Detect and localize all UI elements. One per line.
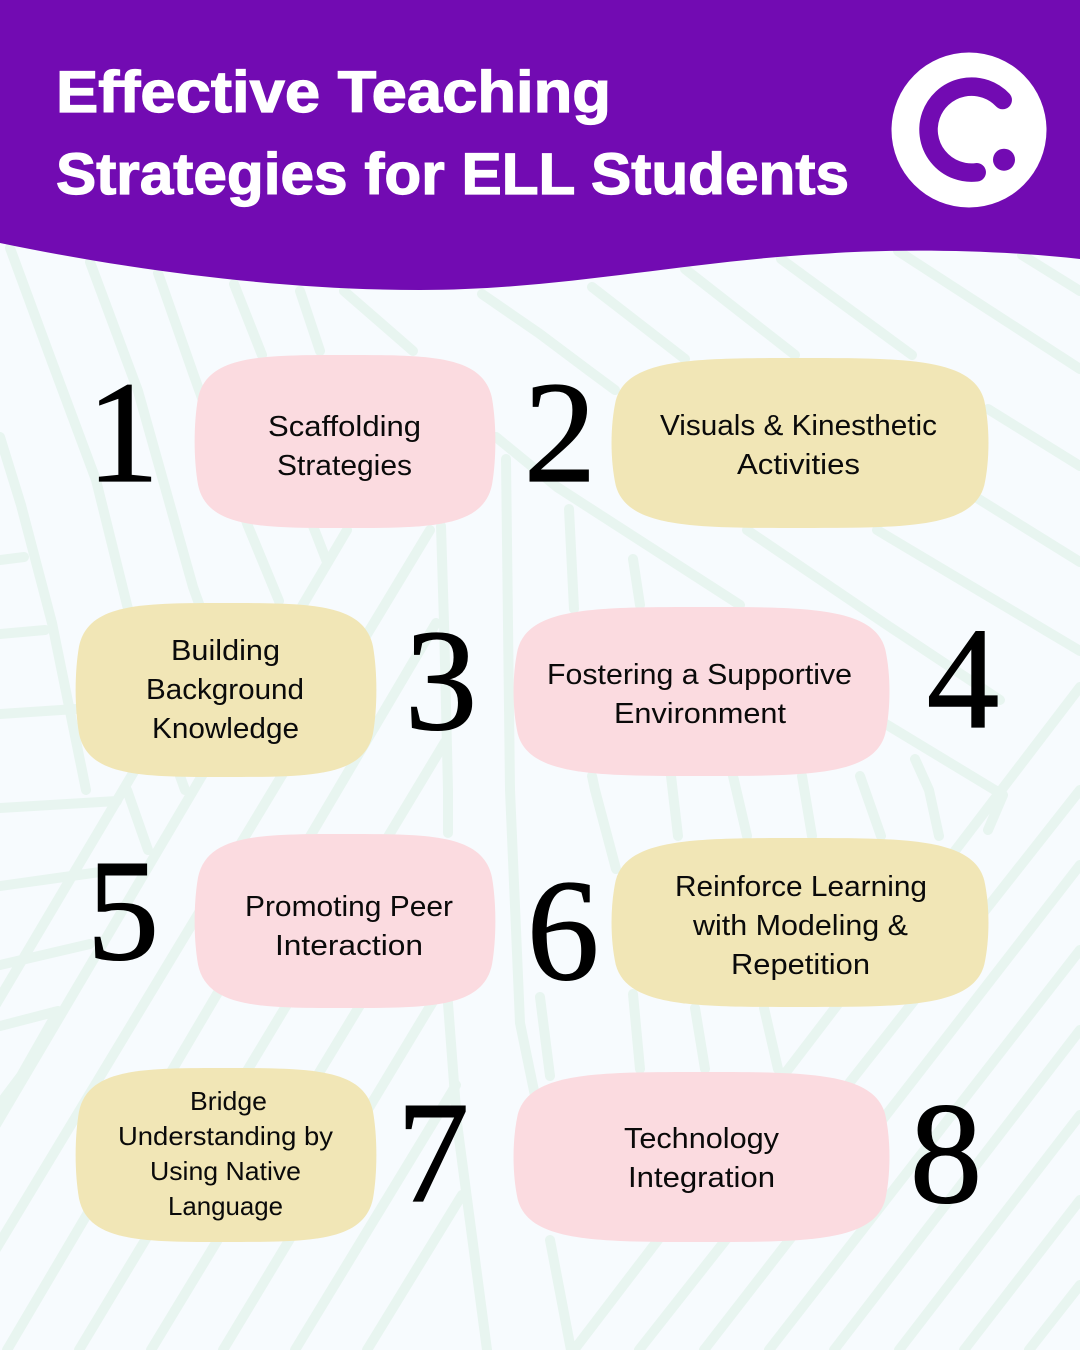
item 7: 7 xyxy=(397,1073,469,1233)
title: Effective Teaching xyxy=(56,60,611,125)
item 3: Background xyxy=(146,674,304,706)
title xyxy=(56,60,849,207)
item 3: Building xyxy=(171,635,280,667)
item 4: Environment xyxy=(614,698,786,730)
item 4 xyxy=(514,599,999,776)
item 1: 1 xyxy=(87,353,159,513)
item 3: 3 xyxy=(405,601,477,761)
item 8: Technology xyxy=(624,1123,780,1155)
item 2 xyxy=(524,353,988,528)
item 1: Strategies xyxy=(277,450,412,482)
item 1 xyxy=(87,353,495,528)
item 6: Repetition xyxy=(731,949,870,981)
item 7: Using Native xyxy=(150,1156,301,1186)
item 7: Language xyxy=(168,1191,283,1221)
item 5: Promoting Peer xyxy=(245,891,453,923)
header banner xyxy=(0,0,1080,290)
item 2: Visuals & Kinesthetic xyxy=(660,410,937,442)
item 5: Interaction xyxy=(275,930,423,962)
item 2: Activities xyxy=(737,449,860,481)
item 7: Understanding by xyxy=(118,1121,333,1151)
item 4: 4 xyxy=(927,599,999,759)
item 3 xyxy=(76,601,477,777)
item 6: 6 xyxy=(527,851,599,1011)
item 8: Integration xyxy=(628,1162,775,1194)
item 2: 2 xyxy=(524,353,596,513)
icon: logo xyxy=(892,52,1046,208)
item 6: with Modeling & xyxy=(692,910,908,942)
item 7: Bridge xyxy=(190,1086,267,1116)
item 8: 8 xyxy=(910,1074,982,1234)
item 6: Reinforce Learning xyxy=(675,871,927,903)
item 4: Fostering a Supportive xyxy=(547,659,852,691)
item 1: Scaffolding xyxy=(268,411,421,443)
item 5 xyxy=(87,831,495,1008)
item 6 xyxy=(527,838,988,1011)
item 5: 5 xyxy=(87,831,159,991)
title: Strategies for ELL Students xyxy=(56,142,849,207)
item 8 xyxy=(514,1072,982,1242)
item 7 xyxy=(76,1068,469,1242)
item 3: Knowledge xyxy=(152,713,299,745)
